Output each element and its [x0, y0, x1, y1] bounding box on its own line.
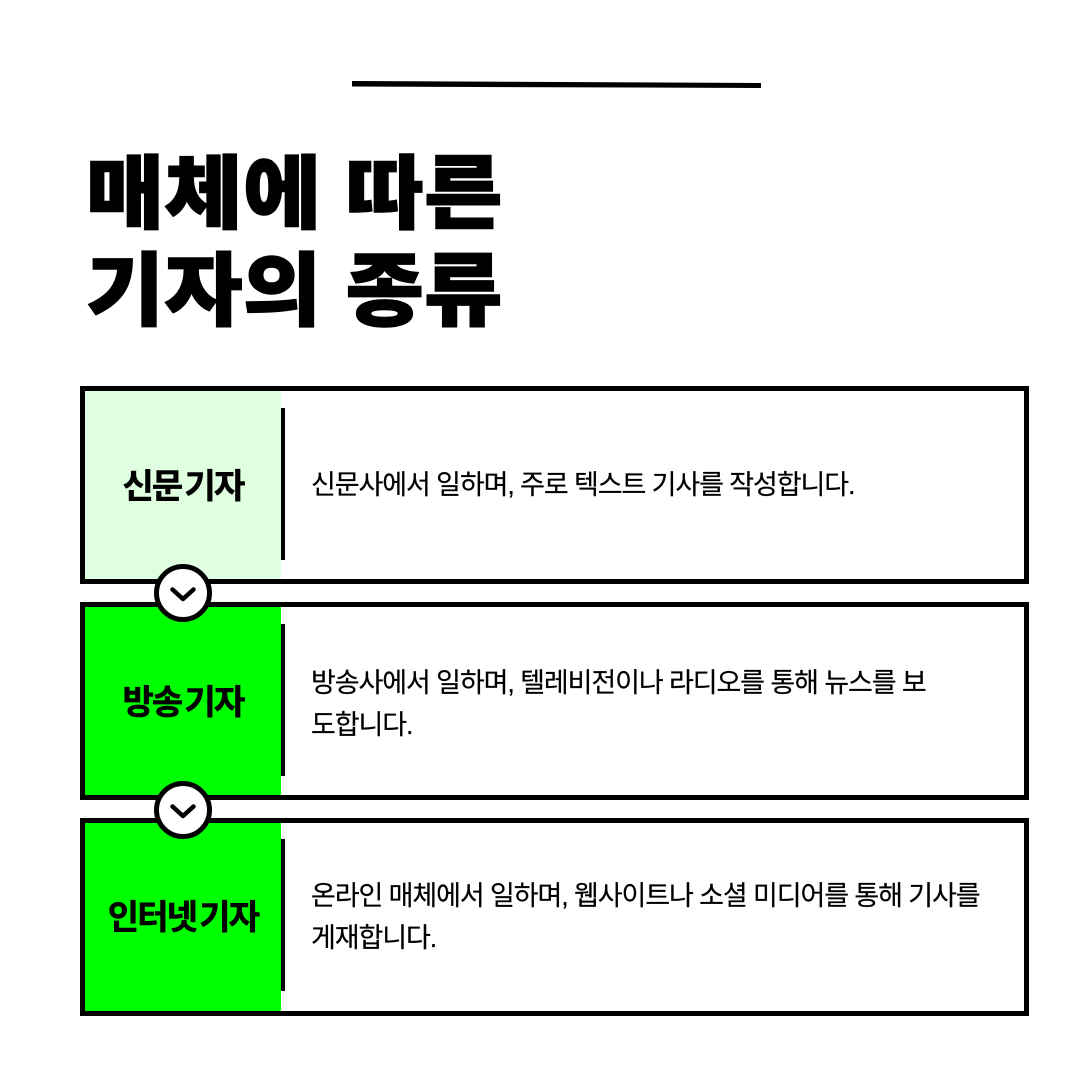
title	[86, 150, 503, 336]
description	[311, 668, 926, 740]
description: 신문사에서 일하며, 주로 텍스트 기사를 작성합니다.	[311, 470, 854, 500]
description: 게재합니다.	[311, 923, 436, 953]
title: 매체에 따른	[86, 150, 503, 239]
icon: chevron connector 2	[154, 781, 212, 839]
panel: internet reporter	[80, 818, 1029, 1016]
description: 온라인 매체에서 일하며, 웹사이트나 소셜 미디어를 통해 기사를	[311, 881, 979, 911]
divider bar	[281, 624, 285, 776]
description: 방송사에서 일하며, 텔레비전이나 라디오를 통해 뉴스를 보	[311, 668, 926, 698]
label: 인터넷 기자: 인터넷 기자	[108, 899, 258, 937]
label: 방송 기자: 방송 기자	[122, 684, 244, 722]
description: 도합니다.	[311, 710, 412, 740]
panel: newspaper reporter	[80, 386, 1029, 584]
divider bar	[281, 408, 285, 560]
title: 기자의 종류	[86, 247, 503, 336]
side label background	[85, 823, 281, 1011]
description	[311, 881, 980, 953]
divider bar	[281, 839, 285, 991]
panel: broadcast reporter	[80, 602, 1029, 800]
top rule	[352, 81, 761, 88]
label: 신문 기자: 신문 기자	[122, 468, 244, 506]
side label background	[85, 391, 281, 579]
side label background	[85, 607, 281, 795]
icon: chevron connector 1	[154, 564, 212, 622]
